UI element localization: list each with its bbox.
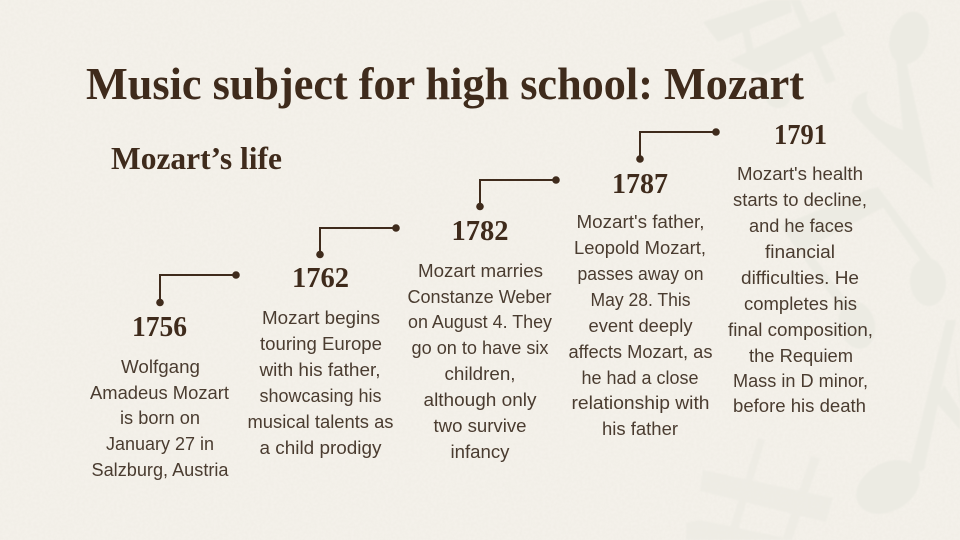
text 1787: May 28. This xyxy=(590,290,690,310)
text 1762: a child prodigy xyxy=(260,438,382,458)
text 1791: financial xyxy=(765,242,835,262)
text 1762: showcasing his xyxy=(260,386,382,406)
text 1787: he had a close xyxy=(582,368,698,388)
text 1791: Mozart's health xyxy=(737,164,863,184)
text 1782: children, xyxy=(444,364,516,384)
year 1756: 1756 xyxy=(132,311,187,343)
text 1782: although only xyxy=(424,390,536,410)
text 1791 xyxy=(728,164,873,416)
text 1756: January 27 in xyxy=(106,434,214,454)
text 1782: two survive xyxy=(434,416,526,436)
text 1787: affects Mozart, as xyxy=(568,342,712,362)
text 1782: infancy xyxy=(450,442,510,462)
timeline item: 1787 xyxy=(568,128,720,439)
text 1787 xyxy=(568,212,712,439)
text 1791: before his death xyxy=(733,396,866,416)
icon: eighth note right xyxy=(852,6,935,190)
text 1787: Mozart's father, xyxy=(576,212,704,232)
text 1791: completes his xyxy=(744,294,857,314)
year 1791: 1791 xyxy=(774,119,827,151)
timeline item: 1762 xyxy=(248,224,400,458)
connector 1762 xyxy=(316,224,400,258)
icon: beamed notes bottom xyxy=(686,438,833,540)
text 1756 xyxy=(90,357,229,480)
text 1787: Leopold Mozart, xyxy=(574,238,706,258)
text 1762: touring Europe xyxy=(260,334,382,354)
text 1756: Wolfgang xyxy=(121,357,200,377)
text 1762: Mozart begins xyxy=(262,308,380,328)
decorative music notes xyxy=(686,0,960,540)
connector 1756 xyxy=(156,271,240,306)
subtitle: Mozart’s life xyxy=(111,140,282,176)
text 1782 xyxy=(408,261,552,462)
text 1756: Amadeus Mozart xyxy=(90,383,229,403)
icon: beamed notes middle right xyxy=(780,187,948,353)
text 1787: passes away on xyxy=(578,264,704,284)
timeline item: 1756 xyxy=(90,271,240,480)
icon: eighth note bottom right xyxy=(847,320,960,525)
icon: beamed notes top right xyxy=(703,0,845,108)
text 1756: Salzburg, Austria xyxy=(92,460,229,480)
text 1782: Mozart marries xyxy=(418,261,543,281)
year 1782: 1782 xyxy=(452,215,508,247)
text 1787: relationship with xyxy=(572,393,710,413)
connector 1782 xyxy=(476,176,560,210)
timeline item: 1782 xyxy=(408,176,560,462)
text 1791: difficulties. He xyxy=(741,268,859,288)
text 1791: Mass in D minor, xyxy=(733,371,868,391)
text 1782: on August 4. They xyxy=(408,312,552,332)
timeline item: 1791 xyxy=(728,119,873,416)
year 1762: 1762 xyxy=(292,262,349,294)
title: Music subject for high school: Mozart xyxy=(86,58,805,109)
text 1791: the Requiem xyxy=(749,346,853,366)
text 1762: musical talents as xyxy=(248,412,394,432)
text 1762 xyxy=(248,308,394,458)
text 1782: Constanze Weber xyxy=(408,287,552,307)
text 1782: go on to have six xyxy=(412,338,548,358)
text 1762: with his father, xyxy=(258,360,380,380)
year 1787: 1787 xyxy=(612,168,668,200)
connector 1787 xyxy=(636,128,720,163)
text 1791: final composition, xyxy=(728,320,873,340)
text 1791: and he faces xyxy=(749,216,853,236)
text 1791: starts to decline, xyxy=(733,190,867,210)
text 1787: his father xyxy=(602,419,678,439)
text 1787: event deeply xyxy=(588,316,692,336)
text 1756: is born on xyxy=(120,408,200,428)
